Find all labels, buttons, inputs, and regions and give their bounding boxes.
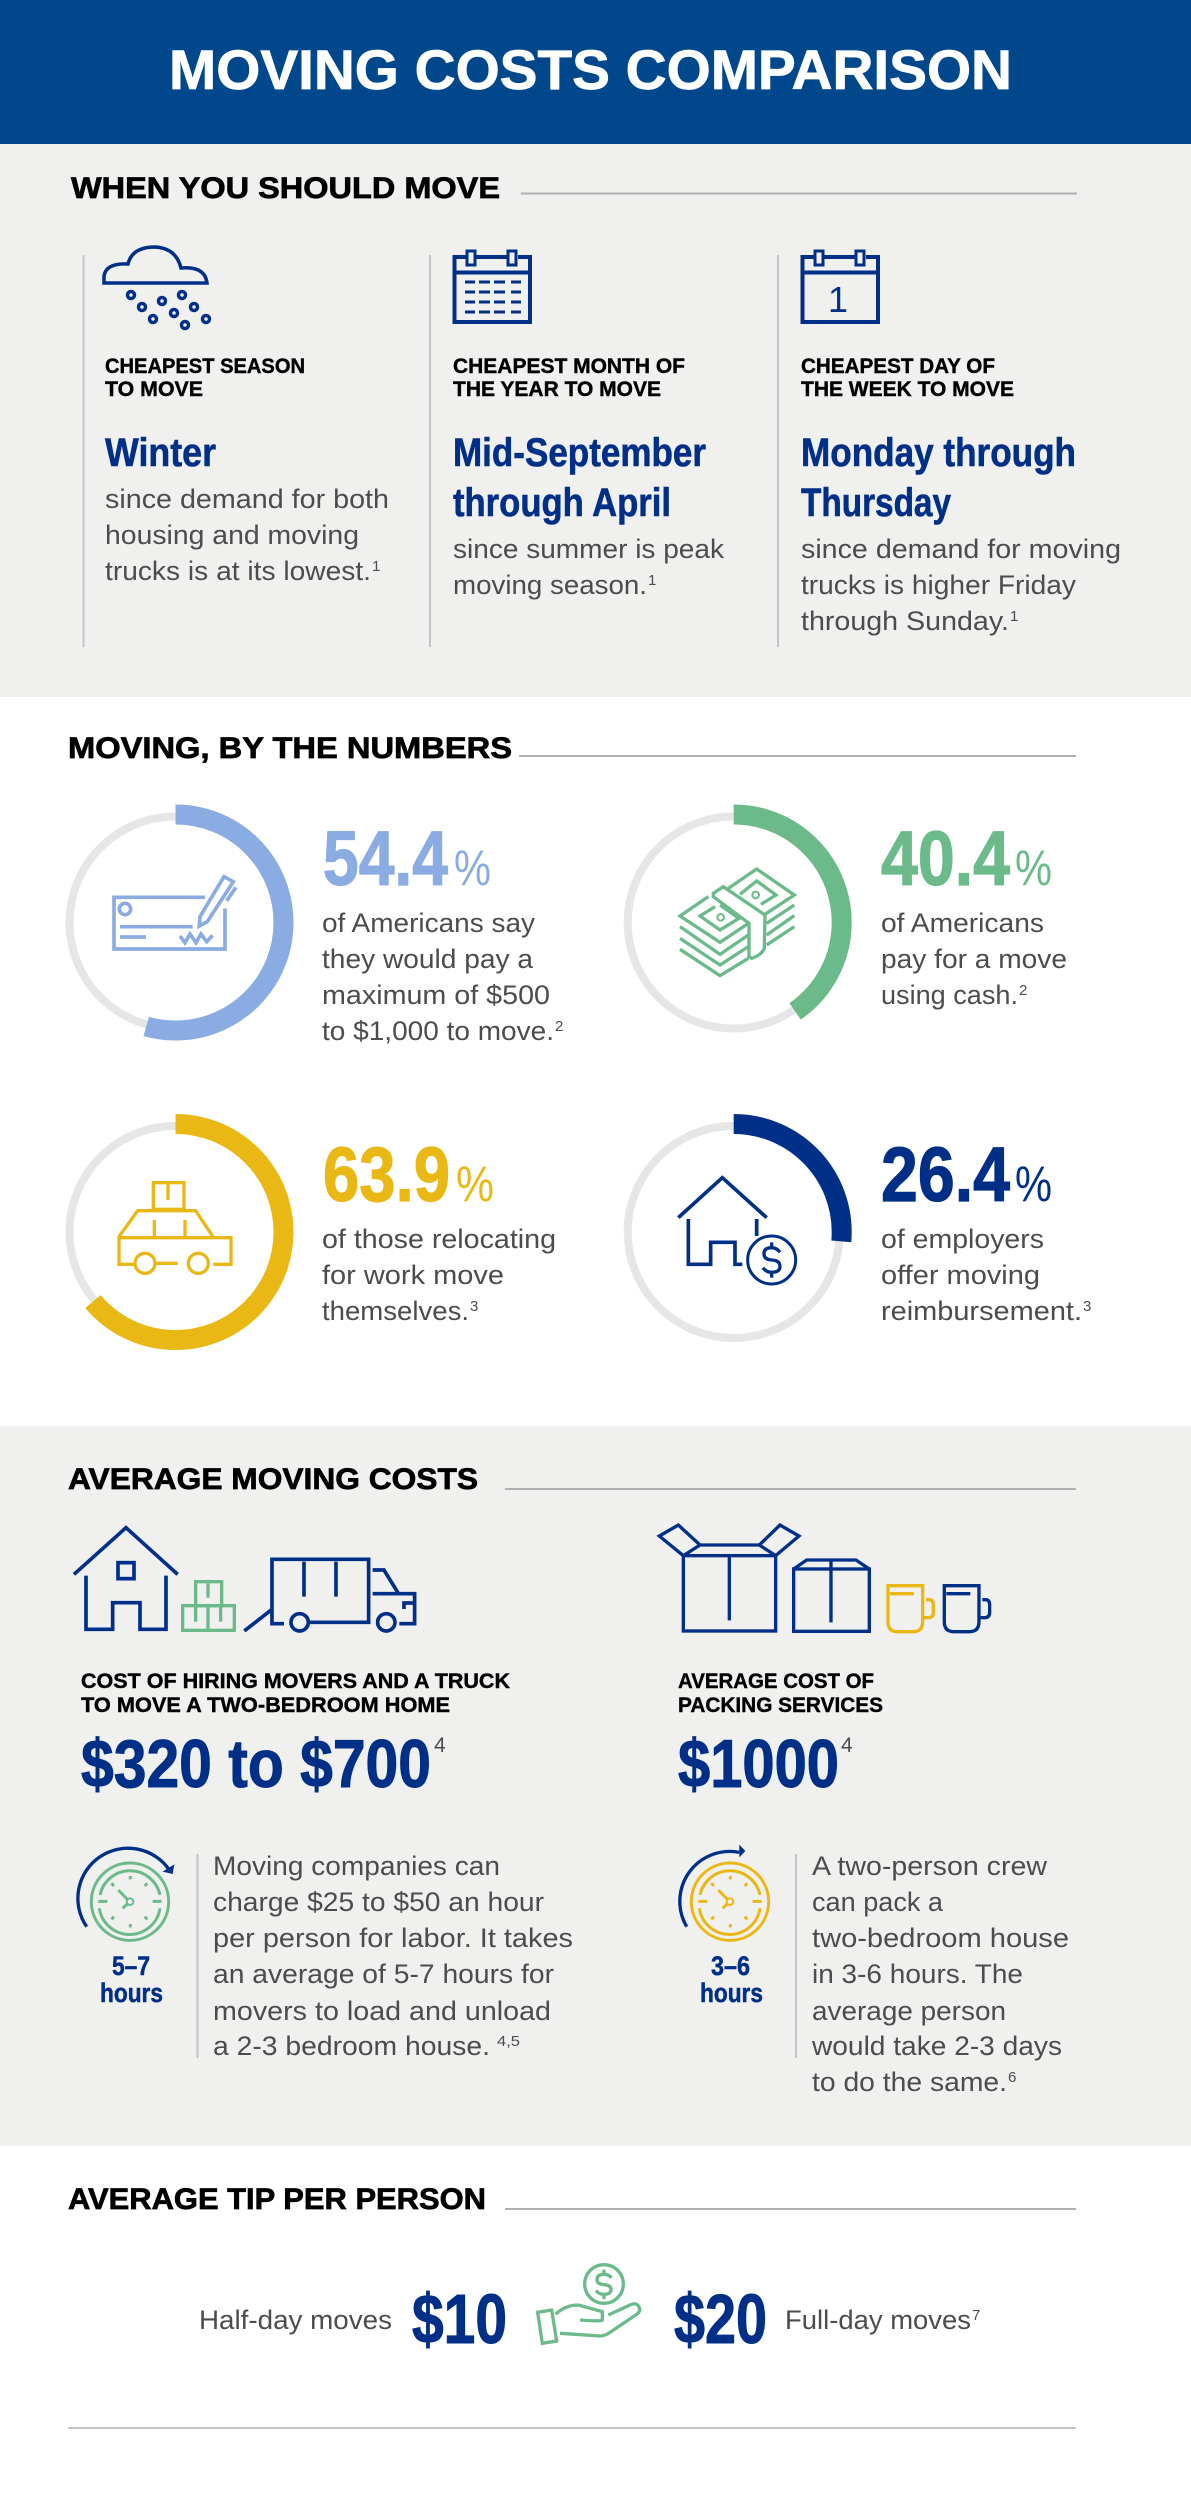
- description: 54.4 percent: to $1,000 to move.: [322, 1016, 554, 1046]
- description: packing time: to do the same.: [812, 2067, 1007, 2097]
- description: month: since summer is peak: [453, 534, 725, 564]
- value: monday through thursday: Thursday: [801, 481, 952, 525]
- label: full-day moves: 7: [972, 2307, 980, 2324]
- icon: house, boxes and truck: [74, 1528, 415, 1631]
- heading: average tip: AVERAGE TIP PER PERSON: [68, 2183, 486, 2216]
- description: winter: trucks is at its lowest.: [105, 556, 371, 586]
- value: 1000 dollars: $1000: [678, 1726, 839, 1802]
- stat: 63.9 percent: [68, 1124, 556, 1340]
- icon: car with box: [119, 1183, 231, 1273]
- label: cheapest season: CHEAPEST SEASON: [105, 355, 305, 378]
- description: labor cost: movers to load and unload: [213, 1996, 551, 2026]
- icon: daily calendar: [802, 251, 878, 322]
- description: 26.4 percent: 3: [1083, 1298, 1091, 1315]
- description: 40.4 percent: of Americans: [881, 908, 1044, 938]
- description: labor cost: per person for labor. It takes: [213, 1923, 573, 1953]
- description: winter: 1: [372, 558, 380, 575]
- description: winter: housing and moving: [105, 520, 359, 550]
- description: packing time: A two-person crew: [812, 1851, 1048, 1881]
- description: day: [801, 534, 1121, 636]
- value: 54.4 percent: 54.4: [323, 816, 448, 902]
- icon: hand with coin: [538, 2265, 640, 2343]
- duration: 3-6 hours: hours: [700, 1978, 763, 2008]
- title banner: MOVING COSTS COMPARISON: [169, 38, 1012, 101]
- heading: by the numbers: MOVING, BY THE NUMBERS: [68, 732, 512, 765]
- column: cheapest season: [84, 247, 389, 647]
- description: labor cost: [213, 1851, 573, 2061]
- value: monday through thursday: Monday through: [801, 431, 1076, 475]
- label: cheapest day: CHEAPEST DAY OF: [801, 355, 995, 378]
- description: 63.9 percent: 3: [470, 1298, 478, 1315]
- icon: yellow clock: [680, 1845, 769, 1940]
- donut chart: 26.4 percent: [626, 1124, 842, 1340]
- column: hiring movers: [74, 1528, 573, 2061]
- panel: average moving costs: [68, 1463, 1076, 2097]
- label: packing services: AVERAGE COST OF: [678, 1670, 874, 1693]
- icon: snow cloud: [104, 247, 210, 328]
- description: 54.4 percent: [322, 908, 563, 1046]
- label: packing services: PACKING SERVICES: [678, 1694, 883, 1717]
- value: 63.9 percent: 63.9: [323, 1132, 450, 1218]
- stat: 40.4 percent: [626, 814, 1067, 1030]
- duration: 3-6 hours: [700, 1951, 763, 2008]
- donut chart: 63.9 percent: [68, 1124, 284, 1340]
- label line two: TO MOVE: [105, 378, 203, 401]
- value: 26.4 percent: 26.4: [881, 1132, 1010, 1218]
- description: labor cost: 4,5: [497, 2033, 520, 2050]
- column: cheapest day: [778, 251, 1121, 647]
- value: 26.4 percent: %: [1015, 1156, 1052, 1212]
- value: 320 to 700 dollars: $320 to $700: [81, 1726, 431, 1802]
- description: month: [453, 534, 725, 600]
- description: 63.9 percent: themselves.: [322, 1296, 469, 1326]
- description: 54.4 percent: they would pay a: [322, 944, 534, 974]
- value: 1000 dollars: 4: [841, 1734, 853, 1757]
- description: 63.9 percent: of those relocating: [322, 1224, 556, 1254]
- value: 63.9 percent: %: [456, 1156, 494, 1212]
- description: packing time: would take 2-3 days: [811, 2031, 1062, 2061]
- label: cost of hiring movers: [81, 1670, 510, 1717]
- description: 54.4 percent: of Americans say: [322, 908, 536, 938]
- heading: when you should move: WHEN YOU SHOULD MOVE: [71, 172, 500, 205]
- description: 54.4 percent: maximum of $500: [322, 980, 550, 1010]
- icon: monthly calendar: [454, 251, 530, 322]
- description: day: 1: [1010, 608, 1018, 625]
- label line two: THE WEEK TO MOVE: [801, 378, 1014, 401]
- value: mid-september through april: [453, 431, 706, 525]
- description: labor cost: an average of 5-7 hours for: [213, 1959, 554, 1989]
- description: packing time: two-bedroom house: [812, 1923, 1069, 1953]
- title banner: [0, 0, 1191, 144]
- description: 40.4 percent: using cash.: [881, 980, 1018, 1010]
- column: cheapest month: [430, 251, 725, 647]
- label: cost of hiring movers: TO MOVE A TWO-BEDROOM HOME: [81, 1694, 450, 1717]
- description: labor cost: charge $25 to $50 an hour: [213, 1887, 544, 1917]
- value: 40.4 percent: 40.4: [881, 816, 1010, 902]
- description: 40.4 percent: pay for a move: [881, 944, 1067, 974]
- panel: moving by the numbers: [68, 732, 1091, 1340]
- description: day: trucks is higher Friday: [801, 570, 1077, 600]
- value: monday through thursday: [801, 431, 1076, 525]
- label: half-day moves: Half-day moves: [199, 2305, 392, 2335]
- description: day: through Sunday.: [801, 606, 1009, 636]
- description: 54.4 percent: 2: [555, 1018, 563, 1035]
- value: 10 dollars: $10: [412, 2280, 507, 2358]
- icon: green clock: [78, 1848, 174, 1940]
- icon: stack of cash: [680, 869, 794, 976]
- stat: 54.4 percent: [68, 814, 563, 1046]
- stat: 26.4 percent: [626, 1124, 1091, 1340]
- value: 20 dollars: $20: [674, 2280, 767, 2358]
- description: month: 1: [648, 572, 656, 589]
- description: labor cost: a 2-3 bedroom house.: [213, 2031, 490, 2061]
- label: full-day moves: Full-day moves: [785, 2305, 971, 2335]
- description: 40.4 percent: [881, 908, 1067, 1010]
- icon: daily calendar: 1: [828, 279, 848, 320]
- icon: boxes and mugs: [659, 1525, 990, 1632]
- panel: when you should move: [71, 172, 1121, 647]
- duration: 3-6 hours: 3–6: [711, 1951, 750, 1981]
- description: 40.4 percent: 2: [1019, 982, 1027, 999]
- description: packing time: average person: [812, 1996, 1006, 2026]
- value: mid-september through april: through April: [453, 481, 671, 525]
- donut chart: 54.4 percent: [68, 814, 284, 1030]
- duration: 5-7 hours: [100, 1951, 163, 2008]
- value: mid-september through april: Mid-September: [453, 431, 706, 475]
- label line two: THE YEAR TO MOVE: [453, 378, 661, 401]
- label: cheapest month: CHEAPEST MONTH OF: [453, 355, 685, 378]
- duration: 5-7 hours: 5–7: [112, 1951, 150, 1981]
- duration: 5-7 hours: hours: [100, 1978, 163, 2008]
- description: winter: [105, 484, 389, 586]
- description: 26.4 percent: of employers: [881, 1224, 1044, 1254]
- label: packing services: [678, 1670, 883, 1717]
- value: 40.4 percent: %: [1015, 840, 1052, 896]
- icon: house with dollar: [678, 1178, 796, 1284]
- description: 26.4 percent: offer moving: [881, 1260, 1040, 1290]
- description: month: moving season.: [453, 570, 647, 600]
- description: packing time: in 3-6 hours. The: [812, 1959, 1023, 1989]
- description: 26.4 percent: [881, 1224, 1091, 1326]
- value: winter: Winter: [105, 431, 216, 475]
- icon: check and pen: [114, 877, 236, 949]
- column: packing services: [659, 1525, 1069, 2097]
- description: 63.9 percent: for work move: [322, 1260, 504, 1290]
- description: labor cost: Moving companies can: [213, 1851, 500, 1881]
- panel: average tip per person: [68, 2183, 1076, 2358]
- label: cost of hiring movers: COST OF HIRING MOVERS AND A TRUCK: [81, 1670, 510, 1693]
- heading: average moving costs: AVERAGE MOVING COSTS: [68, 1463, 478, 1496]
- description: packing time: 6: [1008, 2069, 1016, 2086]
- description: packing time: can pack a: [812, 1887, 944, 1917]
- value: 320 to 700 dollars: 4: [434, 1734, 446, 1757]
- description: winter: since demand for both: [105, 484, 389, 514]
- description: 26.4 percent: reimbursement.: [881, 1296, 1082, 1326]
- value: 54.4 percent: %: [454, 840, 491, 896]
- description: packing time: [811, 1851, 1069, 2097]
- description: day: since demand for moving: [801, 534, 1121, 564]
- description: 63.9 percent: [322, 1224, 556, 1326]
- donut chart: 40.4 percent: [626, 814, 842, 1030]
